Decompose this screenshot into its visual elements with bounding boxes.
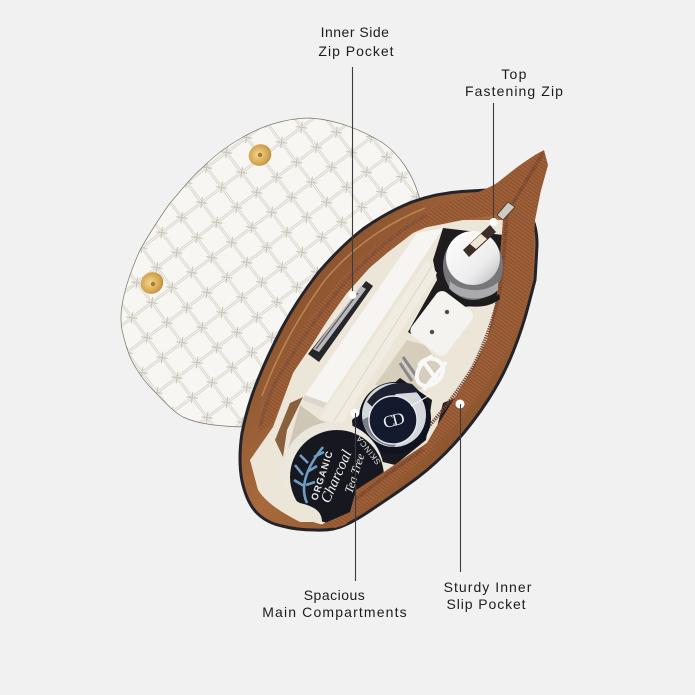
zip slider and puller [463, 202, 515, 257]
item: coiled white cable [400, 356, 446, 390]
bag flap with monogram pattern [121, 118, 430, 427]
inner floor and dark areas clipped to the opening [275, 228, 503, 470]
item: navy compact case [359, 382, 431, 454]
item: charcoal tea tree jar [282, 422, 384, 524]
label text: Fastening Zip [465, 83, 564, 99]
cream lining [250, 220, 503, 525]
icon: blue leaf sprig [294, 447, 324, 503]
right brown fabric band [357, 165, 548, 510]
item: white power adapter [408, 288, 476, 359]
bag rim with black edge [240, 190, 537, 530]
label text: Sturdy Inner [444, 579, 532, 595]
callout: inner side zip pocket [318, 24, 395, 299]
brown band over jar [318, 443, 436, 528]
label text: Slip Pocket [447, 596, 526, 612]
icon: upper magnetic snap [245, 140, 275, 170]
item: charcoal tea tree jar: Charcoal [318, 448, 355, 506]
label text: Inner Side [321, 24, 389, 40]
callout: sturdy inner slip pocket [444, 400, 532, 612]
item: charcoal tea tree jar: Tea Tree [342, 451, 368, 495]
jar label text: ORGANIC [309, 449, 336, 502]
dark brown inner pocket [275, 397, 303, 457]
callout: top fastening zip [465, 66, 564, 226]
left zipper teeth [260, 215, 427, 427]
beige floor [288, 405, 326, 448]
lining fold at jar base [250, 460, 322, 522]
item: charcoal tea tree jar: SKINCA [354, 434, 383, 466]
dark interior behind jar [408, 228, 503, 340]
item: smartphone in side pocket [308, 281, 373, 362]
right zipper teeth [423, 153, 543, 433]
icon: lower magnetic snap [137, 268, 167, 298]
rim highlight [262, 208, 425, 396]
label text: Main Compartments [262, 604, 408, 620]
compact logo: CD [381, 408, 406, 432]
item: silver jar [443, 231, 503, 307]
label text: Spacious [304, 587, 365, 603]
item: white notebook [303, 228, 443, 408]
dark interior behind compact [352, 378, 432, 465]
label text: Top [501, 66, 528, 82]
open bag body [240, 150, 548, 530]
item: slip pocket contents [437, 398, 454, 426]
upper brown fabric band [258, 150, 548, 433]
item: cream notebook [320, 260, 437, 427]
label text: Zip Pocket [318, 43, 395, 59]
callout: spacious main compartments [262, 408, 408, 620]
